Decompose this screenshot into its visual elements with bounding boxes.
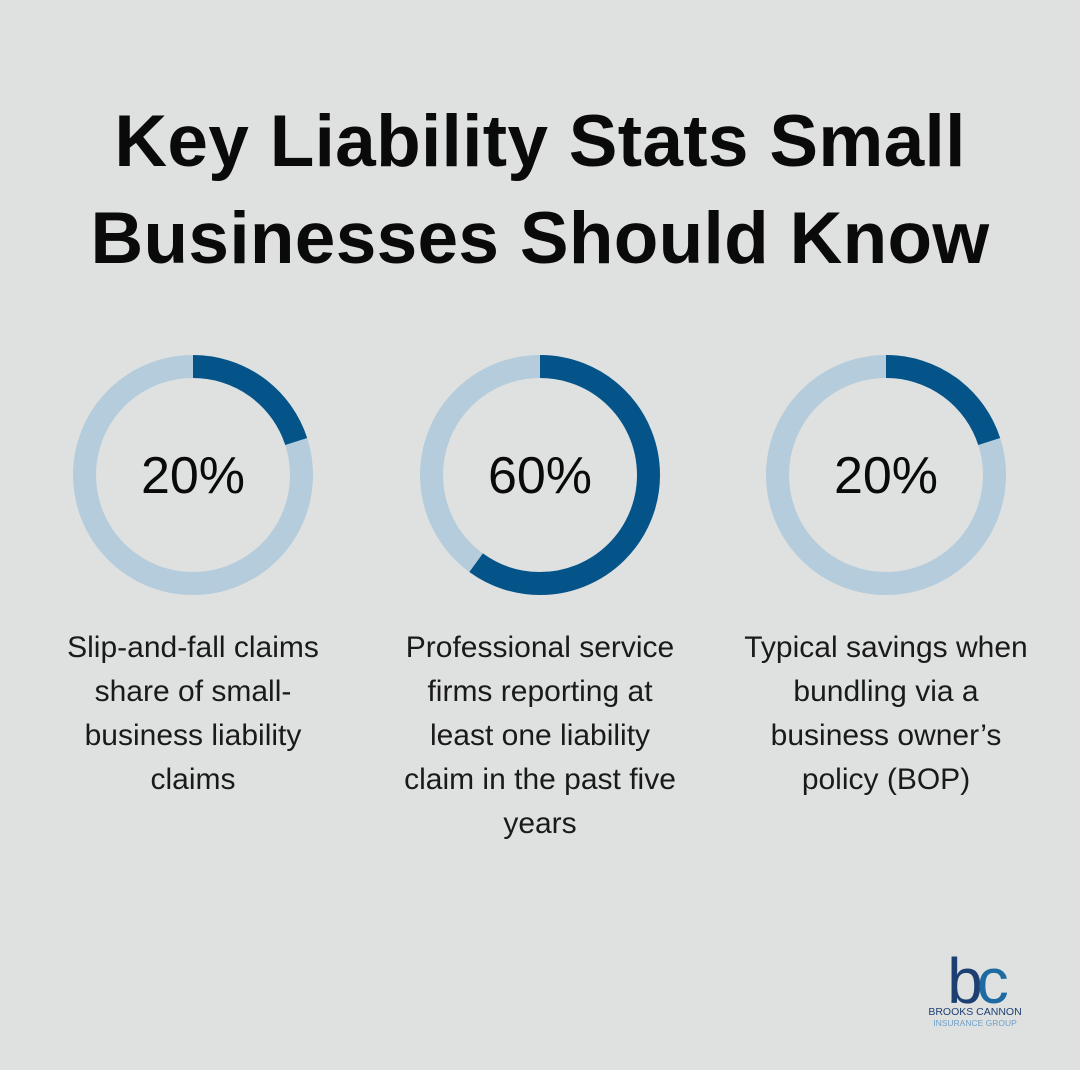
donut chart: 20% slip-and-fall (73, 355, 313, 595)
description 1: share of small- (95, 675, 291, 708)
description 2 (404, 631, 676, 840)
donut chart: 60% professional service: 60% (488, 447, 592, 505)
description 1 (67, 631, 319, 796)
donut chart: 60% professional service (420, 355, 660, 595)
logo: bc (947, 945, 1008, 1017)
title (91, 101, 990, 279)
donut chart: 20% BOP savings (766, 355, 1006, 595)
description 1: business liability (85, 719, 301, 752)
description 2: claim in the past five (404, 763, 676, 796)
description 3: bundling via a (793, 675, 979, 708)
donut chart: 20% BOP savings: 20% (834, 447, 938, 505)
logo: INSURANCE GROUP (933, 1018, 1017, 1028)
logo (928, 945, 1022, 1028)
description 2: firms reporting at (427, 675, 653, 708)
description 3: Typical savings when (744, 631, 1028, 664)
title: Businesses Should Know (91, 198, 989, 279)
description 2: years (503, 807, 577, 840)
description 3: business owner’s (771, 719, 1001, 752)
logo: BROOKS CANNON (928, 1006, 1022, 1018)
description 2: Professional service (406, 631, 674, 664)
description 1: Slip-and-fall claims (67, 631, 319, 664)
donut chart: 20% slip-and-fall: 20% (141, 447, 245, 505)
description 2: least one liability (430, 719, 650, 752)
description 3 (744, 631, 1028, 796)
description 1: claims (150, 763, 236, 796)
title: Key Liability Stats Small (114, 101, 966, 182)
description 3: policy (BOP) (802, 763, 970, 796)
